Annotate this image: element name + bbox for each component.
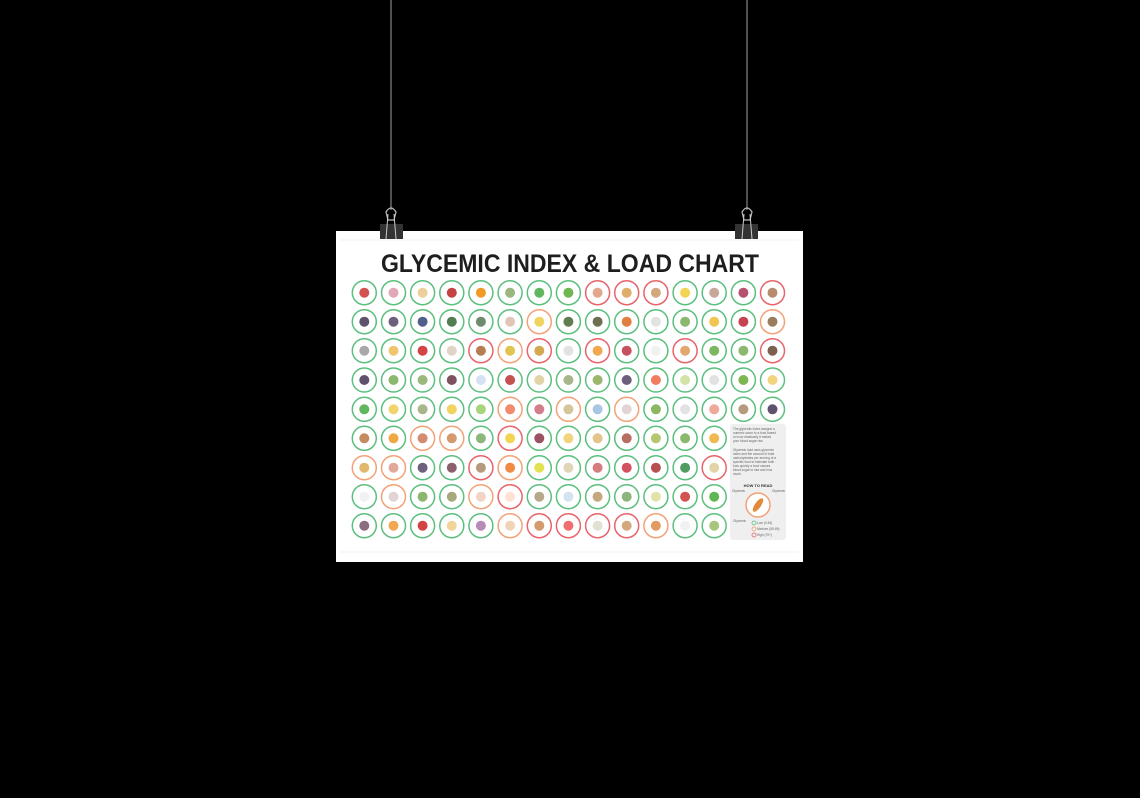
- hanging wires: [391, 0, 747, 210]
- legend: Medium (55-69): [757, 527, 780, 531]
- row 8: [352, 485, 726, 509]
- glycemic load explanation: Glycemic load uses glycemic: [733, 448, 774, 452]
- row 1: [352, 281, 784, 305]
- poster background: [336, 231, 803, 562]
- glycemic load explanation: how quickly a food causes: [733, 464, 771, 468]
- row 9: [352, 514, 726, 538]
- title: GLYCEMIC INDEX & LOAD CHART: [381, 250, 759, 278]
- info panel: how to read: [730, 424, 786, 540]
- binder clip left: [380, 208, 403, 239]
- glycemic load explanation: blood sugar to rise and how: [733, 468, 773, 472]
- example circle: Glycemic: [732, 489, 746, 493]
- glycemic load explanation: index and the amount of total: [733, 452, 774, 456]
- row 7: [352, 456, 726, 480]
- row 6: [352, 426, 726, 450]
- glycemic index explanation: numeric score to a food based: [733, 431, 776, 435]
- food grid: [352, 281, 784, 538]
- binder clip right: [735, 208, 758, 239]
- glycemic load explanation: much.: [733, 472, 742, 476]
- legend: High (70+): [757, 533, 772, 537]
- glycemic load explanation: specific food to estimate both: [733, 460, 775, 464]
- glycemic index explanation: The glycemic index assigns a: [733, 427, 775, 431]
- row 5: [352, 397, 784, 421]
- row 2: [352, 310, 784, 334]
- legend: [752, 521, 780, 537]
- legend: Low (0-54): [757, 521, 772, 525]
- row 4: [352, 368, 784, 392]
- glycemic index explanation: [733, 427, 776, 443]
- row 3: [352, 339, 784, 363]
- glycemic load explanation: [733, 448, 776, 476]
- example circle: [732, 489, 786, 523]
- glycemic index explanation: your blood sugar rise.: [733, 439, 764, 443]
- glycemic load explanation: carbohydrates per serving of a: [733, 456, 776, 460]
- example circle: Glycemic: [733, 519, 747, 523]
- example circle: Glycemic: [772, 489, 786, 493]
- how to read heading: HOW TO READ: [744, 483, 773, 488]
- glycemic index explanation: on how drastically it makes: [733, 435, 771, 439]
